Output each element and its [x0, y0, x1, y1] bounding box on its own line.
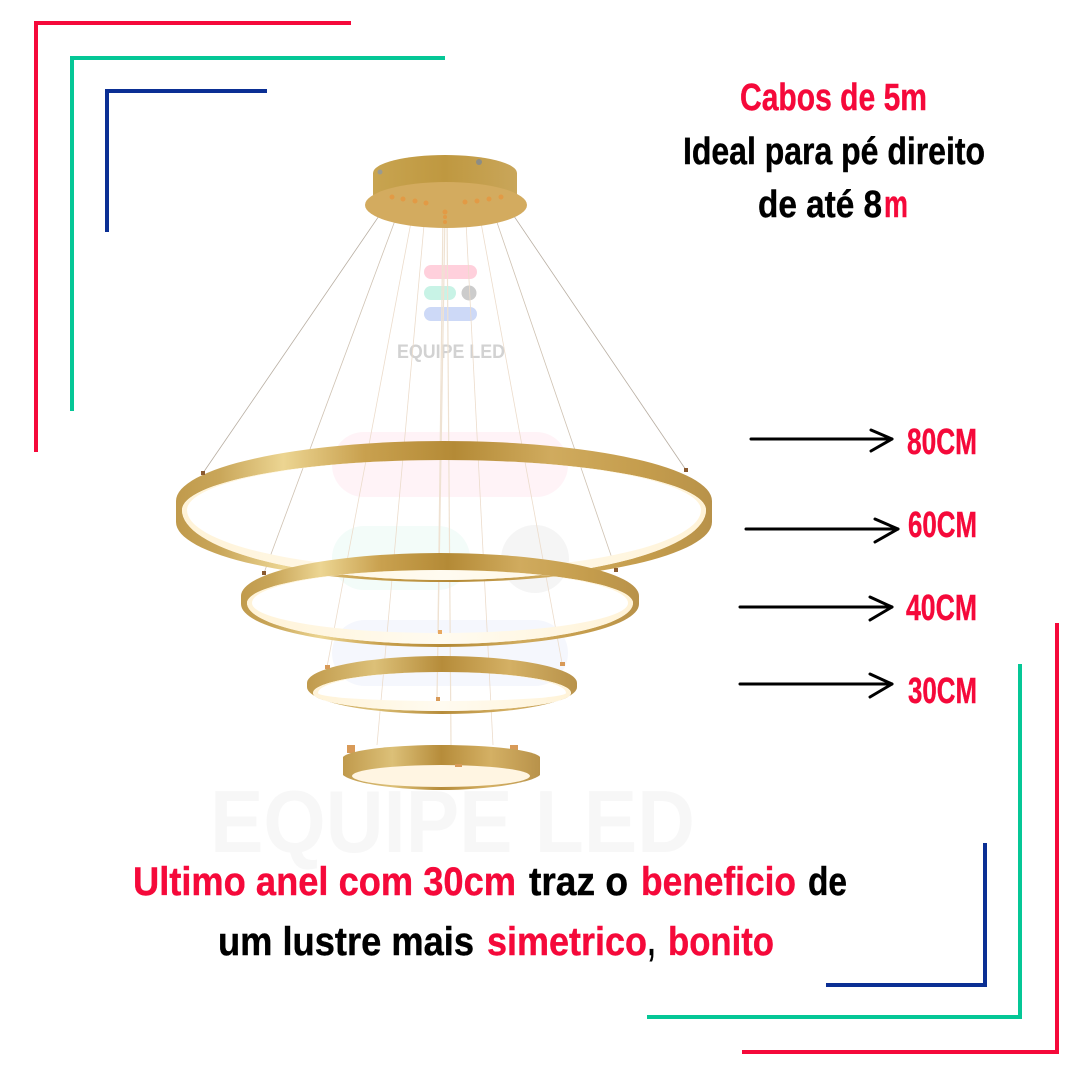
ring: 40cm: [307, 656, 577, 714]
heading: cables: Ideal para pé direito: [683, 131, 985, 173]
caption: bonito: [668, 920, 774, 964]
corner frame: bottom right: [647, 623, 1057, 1052]
corner frame: top left: [36, 23, 445, 452]
heading: cables: [683, 77, 985, 226]
caption: ,: [648, 920, 655, 964]
label: 60CM: 60CM: [908, 504, 977, 545]
arrow: 60cm: [746, 519, 898, 542]
heading: cables: m: [884, 184, 908, 226]
background watermark: EQUIPE LED: [210, 772, 695, 871]
label: 40CM: 40CM: [906, 587, 977, 628]
logo watermark: EQUIPE LED: [397, 342, 505, 363]
heading: cables: Cabos de 5m: [740, 77, 927, 119]
caption: beneficio: [641, 860, 796, 904]
logo watermark: [397, 265, 505, 363]
ceiling canopy: [365, 155, 527, 228]
caption: Ultimo anel com 30cm: [133, 860, 516, 904]
ring: 30cm: [343, 745, 540, 790]
arrow: 80cm: [751, 430, 892, 451]
canopy cable hooks: [390, 194, 504, 224]
arrow: 40cm: [740, 597, 892, 620]
heading: cables: de até 8: [758, 184, 882, 226]
suspension cables: [203, 197, 686, 745]
caption: traz o: [529, 860, 628, 904]
label: 30CM: 30CM: [908, 670, 977, 711]
ring: 80cm: [176, 441, 712, 582]
arrow: 30cm: [740, 674, 892, 697]
background watermark: [210, 432, 695, 871]
caption: de: [808, 860, 847, 904]
caption: um lustre mais: [218, 920, 474, 964]
label: 80CM: 80CM: [907, 421, 977, 462]
caption: simetrico: [487, 920, 647, 964]
ring: 60cm: [241, 553, 639, 647]
caption: [133, 860, 847, 964]
